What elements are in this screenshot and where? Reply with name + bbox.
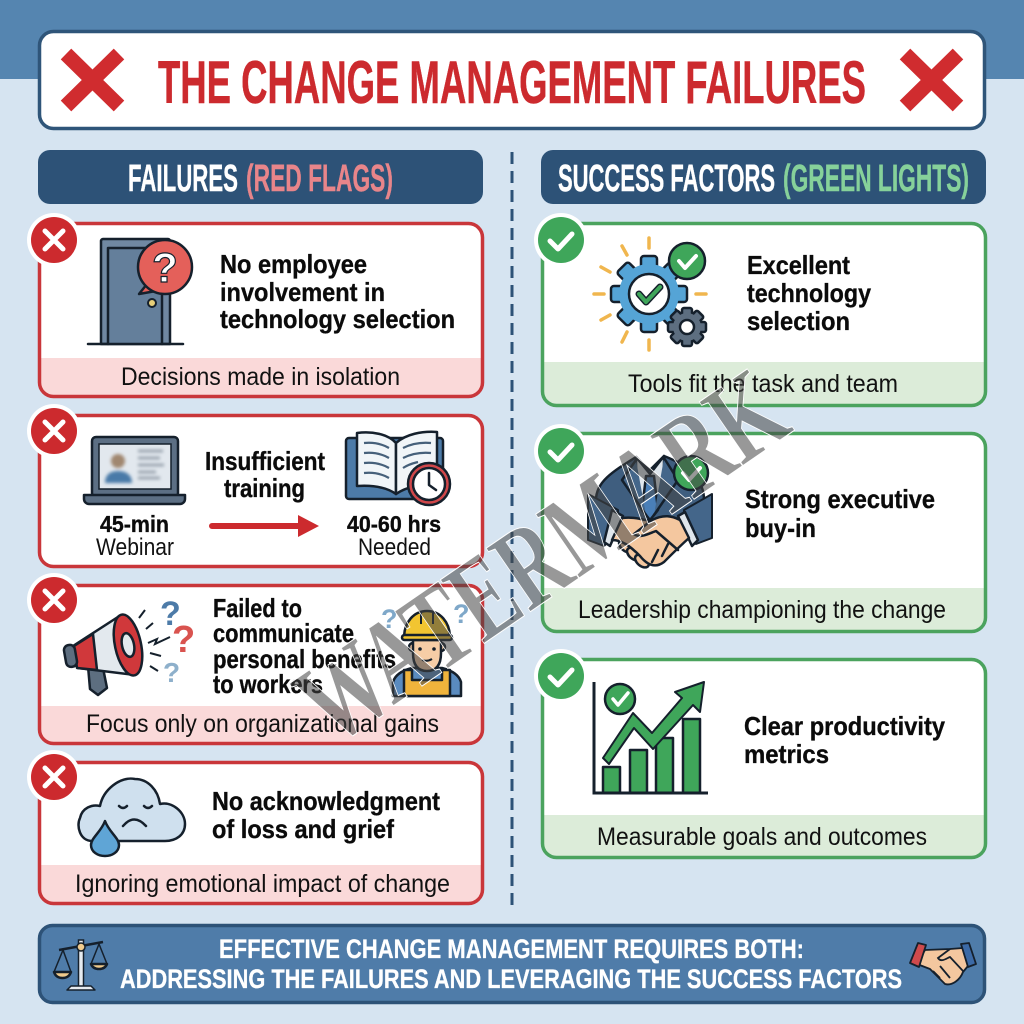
icon: confused worker with hard hat: ? (453, 599, 470, 629)
icon: confused worker with hard hat (381, 599, 470, 696)
label: 40-60 hrs needed (347, 511, 441, 561)
footer message: EFFECTIVE CHANGE MANAGEMENT REQUIRES BOTH: (219, 934, 804, 964)
card heading (220, 249, 455, 334)
label: 45-min webinar: Webinar (96, 534, 174, 561)
panel: failed to communicate (27, 573, 482, 744)
card heading: Clear productivity (744, 711, 945, 741)
panel: strong executive buy-in (534, 424, 986, 632)
card heading: involvement in (220, 277, 385, 307)
icon: rising bar chart (594, 682, 708, 793)
icon: laptop with webinar (84, 437, 185, 504)
card heading (744, 711, 945, 769)
card heading: technology selection (220, 304, 455, 334)
card heading: Insufficient (205, 446, 325, 476)
badge: red cross (27, 404, 81, 458)
icon: right red cross (905, 54, 958, 106)
icon: open book with clock (346, 432, 450, 505)
card heading: selection (747, 306, 850, 336)
icon: executives shaking hands (588, 456, 712, 570)
icon: closed door with question bubble: ? (152, 244, 178, 291)
panel: no employee involvement (27, 213, 482, 396)
heading: failures column: FAILURES (128, 158, 238, 200)
icon: left red cross (66, 54, 119, 106)
card heading (213, 593, 396, 699)
panel: excellent technology selection (534, 213, 986, 406)
icon: confused worker with hard hat: ? (381, 604, 398, 634)
card caption: Ignoring emotional impact of change (75, 870, 450, 898)
panel: no acknowledgment of loss (27, 750, 482, 904)
label: 45-min webinar: 45-min (100, 511, 169, 537)
card heading: buy-in (745, 513, 816, 543)
heading: failures column: (RED FLAGS) (246, 158, 393, 200)
icon: sad cloud with tear (78, 779, 185, 856)
footer banner (40, 926, 984, 1002)
card heading: technology (747, 278, 871, 308)
card caption: Measurable goals and outcomes (597, 823, 927, 851)
card heading: training (224, 473, 305, 503)
card caption: Tools fit the task and team (628, 370, 898, 398)
card heading: Strong executive (745, 484, 935, 514)
icon: megaphone with question marks: ? (172, 619, 195, 661)
card heading (745, 484, 935, 543)
icon: balance scales (54, 940, 107, 990)
title banner (40, 32, 984, 128)
card caption: Focus only on organizational gains (86, 710, 439, 738)
heading: success column: SUCCESS FACTORS (558, 158, 775, 200)
icon: gears with check marks (594, 238, 706, 350)
badge: red cross (27, 573, 81, 627)
label: 40-60 hrs needed: Needed (358, 534, 431, 561)
card heading: personal benefits (213, 644, 396, 674)
heading: success column (541, 150, 986, 204)
card heading: of loss and grief (212, 814, 394, 844)
label: 45-min webinar (96, 511, 174, 561)
icon: small handshake (910, 943, 976, 984)
badge: green check (534, 213, 588, 267)
icon: megaphone with question marks: ? (160, 595, 181, 633)
watermark: WATERMARK (273, 343, 810, 769)
icon: closed door with question bubble (88, 239, 192, 344)
card caption: Leadership championing the change (578, 596, 946, 624)
card caption: Decisions made in isolation (121, 363, 400, 391)
card heading (205, 446, 325, 503)
card heading: to workers (213, 669, 323, 699)
card heading: communicate (213, 618, 354, 648)
card heading: metrics (744, 739, 829, 769)
icon: megaphone with question marks: ? (163, 657, 180, 688)
badge: red cross (27, 750, 81, 804)
card heading: No acknowledgment (212, 786, 440, 816)
card heading (747, 250, 871, 336)
label: 40-60 hrs needed: 40-60 hrs (347, 511, 441, 537)
panel: insufficient training (27, 404, 482, 566)
panel: clear productivity metrics (534, 649, 986, 858)
badge: green check (534, 649, 588, 703)
arrow: webinar to needed hours (209, 515, 319, 537)
card heading: Failed to (213, 593, 302, 623)
badge: red cross (27, 213, 81, 267)
card heading (212, 786, 440, 844)
footer message (120, 934, 902, 994)
card heading: No employee (220, 249, 367, 279)
heading: failures column (38, 150, 483, 204)
card heading: Excellent (747, 250, 850, 280)
badge: green check (534, 424, 588, 478)
icon: megaphone with question marks (63, 595, 195, 695)
